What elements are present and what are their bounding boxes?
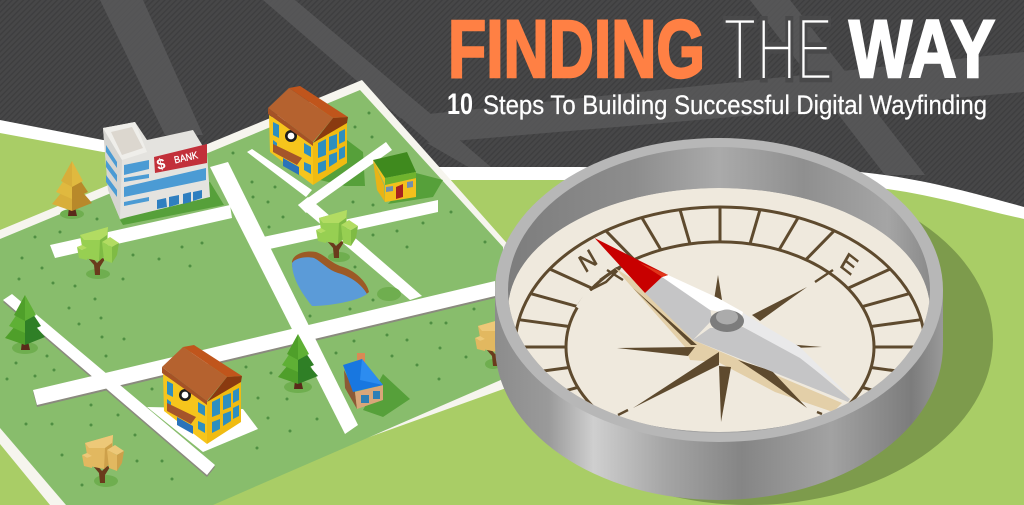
grass dots: [6, 112, 486, 486]
compass: [495, 138, 943, 500]
pond: [292, 251, 369, 306]
ground with white edge: [0, 120, 1024, 505]
tree: tan cube by compass: [475, 318, 517, 369]
title: WAY: [849, 4, 995, 95]
house: yellow with clock, bottom: [162, 345, 242, 444]
title: [448, 0, 995, 100]
title: FINDING: [448, 4, 705, 95]
bank sign: BANK: [173, 150, 199, 166]
compass rim: [495, 138, 943, 442]
N cell: [590, 268, 620, 290]
tree: tan cube bottom: [82, 435, 124, 487]
map border: [0, 80, 520, 505]
tree: green pine centre: [278, 334, 318, 393]
shadow of top house: [320, 140, 365, 186]
needle shadow: [615, 268, 842, 412]
dial rings and ticks: [516, 206, 924, 406]
background roads: [100, 0, 1024, 175]
bank sign: [154, 144, 207, 174]
subtitle: 10: [447, 88, 473, 121]
E letter: E: [836, 248, 862, 281]
compass body: [495, 290, 943, 500]
cardinal cross marks: [600, 268, 833, 415]
compass inner wall: [508, 147, 930, 433]
tree: green cube left: [77, 227, 119, 279]
compass needle: [595, 238, 851, 402]
house: small green roof: [373, 152, 443, 204]
ring gap by N: [578, 290, 590, 308]
house: small blue roof: [343, 353, 410, 417]
tree: yellow pine: [52, 161, 92, 219]
tree: green pine left: [5, 295, 45, 354]
N letter: N: [575, 244, 602, 279]
needle hub: [710, 310, 744, 332]
tree: green cube centre: [316, 210, 358, 262]
bank building: [103, 122, 224, 225]
compass shadow: [507, 175, 993, 505]
map lawn: [0, 90, 503, 505]
title: THE: [723, 0, 833, 100]
compass dial: [508, 188, 930, 432]
bush near pond: [377, 287, 401, 301]
streets: [3, 142, 495, 477]
panel: town map: [0, 80, 520, 505]
bank sign: $: [155, 155, 168, 174]
compass rose: [617, 275, 822, 422]
house: yellow with clock, top: [268, 86, 348, 185]
